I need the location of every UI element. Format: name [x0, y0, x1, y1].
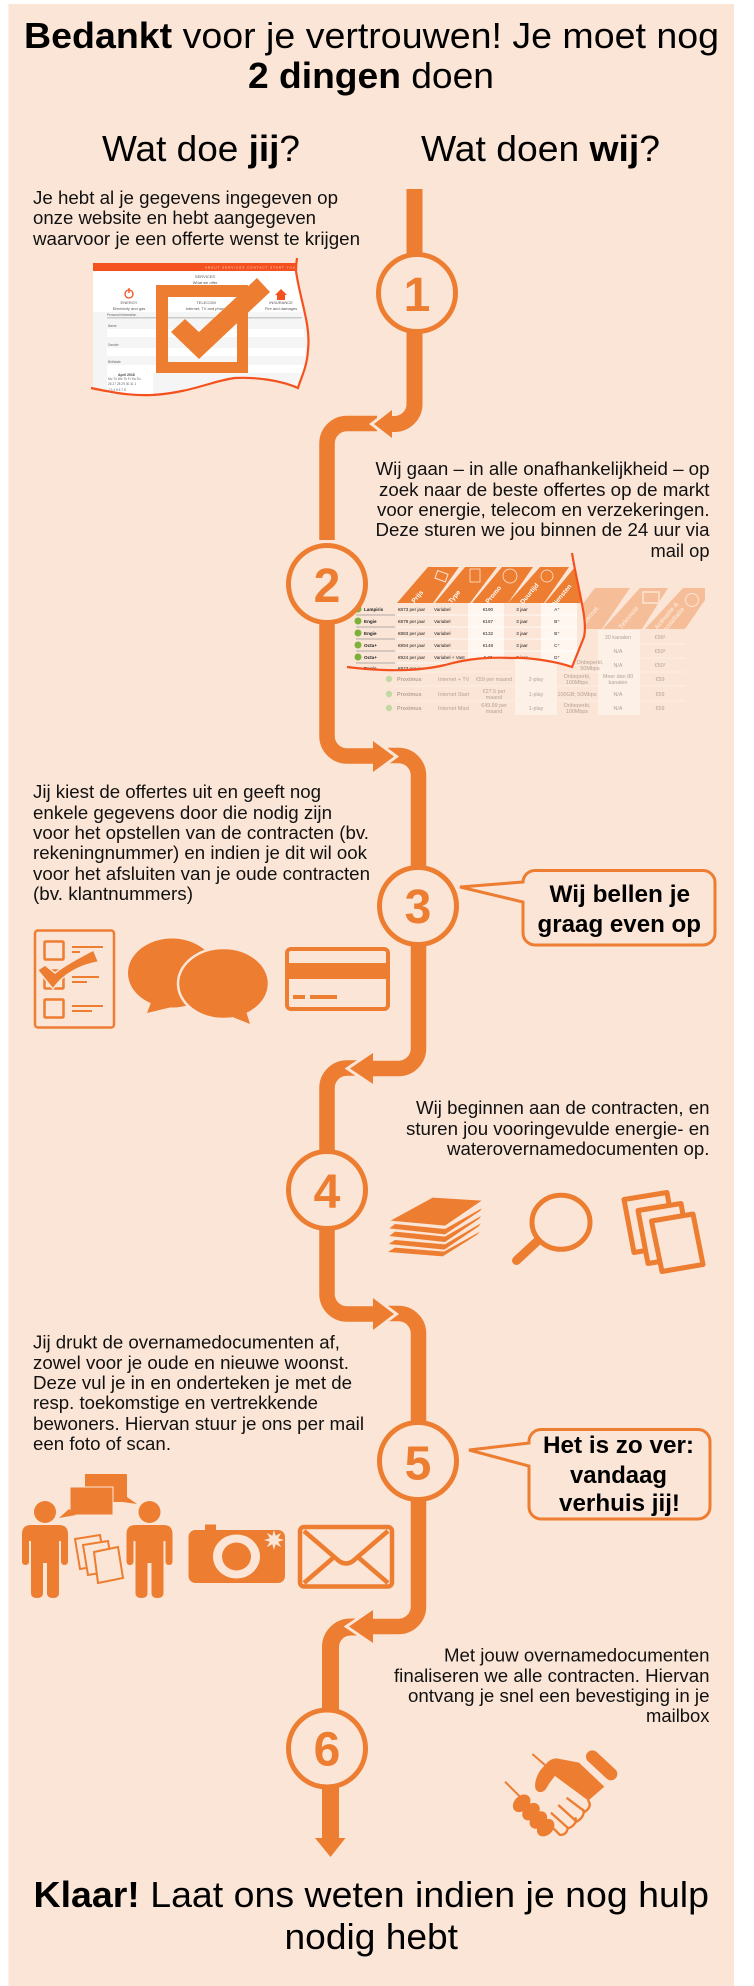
icon: magnifying glass: [516, 1195, 590, 1260]
step 2 comparison table, faded part: N/A: [614, 649, 623, 655]
step 2 comparison table, highlighted part: C⁺: [554, 643, 560, 648]
step 2 text: voor energie, telecom en verzekeringen.: [377, 500, 710, 520]
step 1 website screenshot with checkmark: 2 3 4 5 6 7 8: [108, 388, 126, 392]
step 2 comparison table, faded part: maand: [486, 695, 502, 701]
step 2 comparison table, faded part: Internet Maxi: [438, 706, 469, 712]
step 2 comparison table, faded part: 50Mbps: [580, 666, 600, 672]
step 4 text: waterovernamedocumenten op.: [446, 1139, 710, 1159]
step 2 comparison table, highlighted part: Variabel: [434, 619, 451, 624]
step 2 comparison table, faded part: maand: [486, 709, 502, 715]
step 2 comparison table, faded part: 100Mbps: [566, 680, 588, 686]
step 1 website screenshot with checkmark: Electricity and gas: [113, 306, 145, 311]
step 2 comparison table, faded part: 1-play: [529, 706, 544, 712]
step 1 text: Je hebt al je gegevens ingegeven op: [33, 188, 338, 208]
column heading: Wat doe jij: Wat doe jij?: [102, 128, 300, 169]
step 1 website screenshot with checkmark: Internet, TV and phone: [186, 306, 227, 311]
step 2 comparison table, highlighted part: Lampiris: [364, 607, 384, 612]
step 5 text: Deze vul je in en onderteken je met de: [33, 1373, 352, 1393]
icon: camera: [188, 1524, 285, 1583]
icon: two people with documents and chat: [22, 1474, 172, 1598]
step circle 5: [380, 1422, 456, 1500]
step circle 2: 2: [314, 560, 340, 613]
step circle 2: [288, 546, 366, 622]
step 3 text: (bv. klantnummers): [33, 884, 193, 904]
step 1 website screenshot with checkmark: TELECOM: [196, 300, 216, 305]
step 2 comparison table, faded part: Internet: [580, 605, 601, 628]
step 1 website screenshot with checkmark: [91, 258, 309, 395]
step 2 comparison table, faded part: 30 kanalen: [605, 635, 631, 641]
step 2 comparison table, highlighted part: [346, 552, 586, 672]
icon: speech bubbles: [128, 938, 269, 1024]
step circle 4: [288, 1152, 366, 1228]
step 2 comparison table, faded part: Activatie &: [653, 601, 681, 631]
step 1 website screenshot with checkmark: Name: [108, 324, 117, 328]
step 2 comparison table, faded part: Proximus: [397, 677, 422, 683]
step 2 comparison table, faded part: N/A: [614, 663, 623, 669]
path segment and arrow 3 to 4: [327, 945, 418, 1155]
final arrow down: [315, 1785, 346, 1857]
step 2 comparison table, highlighted part: €148: [483, 643, 494, 648]
path segment and arrow 1 to 2: [327, 189, 414, 540]
callout: wij bellen je: graag even op: [538, 911, 701, 938]
step 3 text: voor het afsluiten van je oude contracten: [33, 864, 370, 884]
step 2 comparison table, faded part: €50²: [655, 649, 666, 655]
step 2 comparison table, highlighted part: 3 jaar: [516, 607, 528, 612]
step 2 comparison table, faded part: 100GB; 50Mbps: [558, 692, 597, 698]
step 5 text: zowel voor je oude en nieuwe woonst.: [33, 1353, 349, 1373]
step circle 5: 5: [405, 1438, 431, 1490]
step 2 comparison table, faded part: €59: [656, 692, 664, 698]
step 1 website screenshot with checkmark: Gender: [108, 343, 120, 347]
step 5 text: [33, 1332, 364, 1454]
step 2 comparison table, highlighted part: €883 per jaar: [398, 631, 426, 636]
step 1 text: waarvoor je een offerte wenst te krijgen: [32, 229, 360, 249]
step 2 comparison table, highlighted part: Engie: [364, 631, 377, 636]
step 1 website screenshot with checkmark: SERVICES: [195, 274, 215, 279]
step 2 comparison table, faded part: N/A: [614, 706, 623, 712]
step 2 comparison table, faded part: Onbeperkt,: [564, 703, 591, 709]
step 2 comparison table, highlighted part: €879 per jaar: [398, 619, 426, 624]
step 2 comparison table, highlighted part: 3 jaar: [516, 655, 528, 660]
path segment and arrow 4 to 5: [327, 1225, 418, 1425]
step 3 text: voor het opstellen van de contracten (bv.: [33, 823, 369, 843]
step 5 text: bewoners. Hiervan stuur je ons per mail: [33, 1414, 364, 1434]
icon: documents: [624, 1192, 703, 1272]
step 2 comparison table, highlighted part: Type: [447, 589, 462, 605]
callout: het is zo ver: [469, 1430, 710, 1519]
step 2 comparison table, faded part: 1-play: [529, 692, 544, 698]
step 1 website screenshot with checkmark: What we offer: [193, 280, 218, 285]
step circle 6: [288, 1710, 366, 1787]
step 2 comparison table, highlighted part: Vast: [434, 666, 444, 671]
step 2 comparison table, highlighted part: €190: [483, 607, 494, 612]
step 2 comparison table, highlighted part: Diensten: [550, 583, 573, 609]
step 2 comparison table, highlighted part: 3 jaar: [516, 631, 528, 636]
step 2 comparison table, highlighted part: 3 jaar: [516, 619, 528, 624]
step circle 6: 6: [314, 1724, 340, 1776]
step 2 comparison table, faded part: N/A: [614, 692, 623, 698]
step 2 comparison table, faded part: €59: [656, 677, 664, 683]
step 6 text: [394, 1646, 710, 1726]
step 4 text: Wij beginnen aan de contracten, en: [416, 1098, 710, 1118]
closing text: Klaar! Laat ons weten indien je nog hulp: [34, 1874, 709, 1915]
closing text: [34, 1874, 709, 1957]
step 2 comparison table, highlighted part: Prijs: [411, 589, 425, 605]
step 2 comparison table, highlighted part: Octa+: [364, 643, 377, 648]
step 5 text: Jij drukt de overnamedocumenten af,: [33, 1332, 340, 1352]
step 2 comparison table, highlighted part: Promo: [485, 585, 503, 605]
step 2 comparison table, highlighted part: Variabel: [434, 643, 451, 648]
step 2 comparison table, highlighted part: Octa+: [364, 655, 377, 660]
step 6 text: ontvang je snel een bevestiging in je: [408, 1686, 710, 1706]
callout: wij bellen je: Wij bellen je: [550, 881, 690, 908]
step 6 text: Met jouw overnamedocumenten: [444, 1646, 710, 1666]
step 2 text: mail op: [650, 541, 710, 561]
column heading: Wat doen wij: Wat doen wij?: [421, 128, 660, 169]
step 2 comparison table, faded part: Internet + TV: [438, 677, 470, 683]
step 2 comparison table, faded part: Internet Start: [438, 692, 470, 698]
step 2 text: [376, 459, 711, 561]
step circle 1: [378, 254, 456, 332]
step 2 comparison table, highlighted part: A⁺: [554, 607, 560, 612]
path segment and arrow 2 to 3: [327, 620, 418, 870]
icon: checklist: [35, 930, 114, 1028]
icon: stack of papers: [388, 1198, 482, 1256]
step 2 comparison table, highlighted part: €924 per jaar: [398, 655, 426, 660]
callout: het is zo ver: Het is zo ver:: [543, 1432, 694, 1459]
step 3 text: rekeningnummer) en indien je dit wil ook: [33, 843, 368, 863]
path segment and arrow 5 to 6: [330, 1495, 418, 1715]
step 1 website screenshot with checkmark: ENERGY: [121, 300, 138, 305]
step 2 comparison table, highlighted part: €923 per jaar: [398, 666, 426, 671]
icon: envelope: [300, 1527, 392, 1586]
step 6 text: mailbox: [646, 1706, 710, 1726]
step 2 comparison table, highlighted part: €167: [483, 619, 494, 624]
step 2 comparison table, highlighted part: Variabel: [434, 631, 451, 636]
step 2 comparison table, faded part: Proximus: [397, 706, 422, 712]
step circle 4: 4: [314, 1166, 341, 1219]
step 2 text: Wij gaan – in alle onafhankelijkheid – op: [376, 459, 710, 479]
step circle 3: 3: [405, 881, 431, 934]
step 1 text: onze website en hebt aangegeven: [33, 208, 316, 228]
step 2 comparison table, faded part: 2-play: [529, 677, 544, 683]
step 2 comparison table, faded part: €59 per maand: [476, 677, 512, 683]
step 1 website screenshot with checkmark: Mo Tu We Th Fr Sa Su: [108, 377, 141, 381]
callout: het is zo ver: verhuis jij!: [559, 1490, 680, 1517]
step 2 comparison table, highlighted part: € 33: [484, 655, 493, 660]
step 2 comparison table, highlighted part: €132: [483, 631, 494, 636]
step 2 comparison table, faded part: €59: [656, 706, 664, 712]
step 5 text: een foto of scan.: [33, 1434, 171, 1454]
title: [24, 15, 719, 96]
step 2 text: zoek naar de beste offertes op de markt: [379, 480, 710, 500]
title: 2 dingen doen: [248, 55, 494, 96]
step 2 comparison table, faded part: €49.99 per: [481, 703, 507, 709]
step 2 comparison table, highlighted part: Engie: [364, 619, 377, 624]
title: Bedankt voor je vertrouwen! Je moet nog: [24, 15, 719, 56]
step 2 comparison table, faded part: Onbeperkt,: [577, 660, 604, 666]
step 3 text: enkele gegevens door die nodig zijn: [33, 803, 332, 823]
step 1 text: [32, 188, 360, 249]
step 2 comparison table, highlighted part: €894 per jaar: [398, 643, 426, 648]
step 4 text: [406, 1098, 710, 1159]
step 3 text: [33, 782, 370, 904]
step 2 comparison table, faded part: Televisie: [617, 605, 640, 631]
step 2 comparison table, faded part: 100Mbps: [566, 709, 588, 715]
step 2 comparison table, faded part: Proximus: [397, 692, 422, 698]
step 2 comparison table, highlighted part: Variabel + Vast: [434, 655, 465, 660]
step circle 1: 1: [404, 269, 430, 322]
step 4 text: sturen jou vooringevulde energie- en: [406, 1119, 710, 1139]
step 3 text: Jij kiest de offertes uit en geeft nog: [33, 782, 321, 802]
step 2 comparison table, highlighted part: Variabel: [434, 607, 451, 612]
callout: het is zo ver: vandaag: [570, 1462, 667, 1489]
step 2 comparison table, highlighted part: B⁺: [554, 631, 560, 636]
step 2 comparison table, faded part: €50²: [655, 663, 666, 669]
step 2 comparison table, faded part: kanalen: [609, 680, 627, 686]
step 1 website screenshot with checkmark: ABOUT SERVICES CONTACT START YOUR: [205, 266, 299, 270]
closing text: nodig hebt: [284, 1916, 458, 1957]
step 2 comparison table, faded part: Meer dan 80: [603, 674, 633, 680]
step 2 comparison table, highlighted part: 3 jaar: [516, 643, 528, 648]
step 5 text: resp. toekomstige en vertrekkende: [33, 1393, 318, 1413]
step 2 comparison table, faded part: [386, 588, 705, 715]
step 2 comparison table, faded part: €27.5 per: [483, 689, 506, 695]
icon: handshake: [505, 1754, 611, 1840]
step 1 website screenshot with checkmark: Fire and damages: [265, 306, 297, 311]
step 1 website screenshot with checkmark: 26 27 28 29 30 31 1: [108, 382, 137, 386]
step 2 comparison table, highlighted part: B⁺: [554, 619, 560, 624]
step 2 comparison table, highlighted part: €873 per jaar: [398, 607, 426, 612]
step 2 comparison table, highlighted part: Duurtijd: [519, 582, 541, 606]
step 1 website screenshot with checkmark: INSURANCE: [269, 300, 293, 305]
step 2 comparison table, faded part: Onbeperkt,: [564, 674, 591, 680]
icon: bank card: [287, 949, 388, 1009]
step 1 website screenshot with checkmark: Birthdate: [108, 360, 121, 364]
step circle 3: [380, 868, 456, 944]
step 2 comparison table, faded part: installatie: [662, 606, 686, 634]
step 2 comparison table, highlighted part: D⁺: [554, 655, 560, 660]
step 2 text: Deze sturen we jou binnen de 24 uur via: [376, 520, 711, 540]
step 2 comparison table, faded part: €99¹: [655, 635, 666, 641]
step 1 website screenshot with checkmark: April 2018: [118, 373, 135, 377]
step 6 text: finaliseren we alle contracten. Hiervan: [394, 1666, 710, 1686]
callout: wij bellen je: [460, 870, 715, 945]
step 1 website screenshot with checkmark: Personal information: [107, 313, 136, 317]
step 2 comparison table, highlighted part: Engie: [364, 666, 377, 671]
